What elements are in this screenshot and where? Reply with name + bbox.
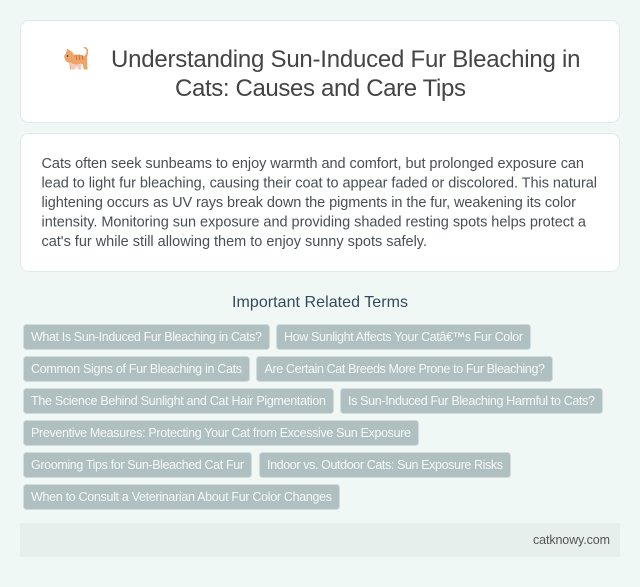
tag: what is: What Is Sun-Induced Fur Bleaching in Cats? [31, 330, 262, 344]
tag: what is [24, 324, 270, 350]
tag: common signs [24, 356, 250, 382]
text block: introduction: cat's fur while still allowing them to enjoy sunny spots safely. [42, 234, 427, 250]
title: Understanding Sun-Induced Fur Bleaching in [111, 46, 580, 73]
text block: introduction: lead to light fur bleaching, causing their coat to appear faded or discolored. This natural [42, 176, 597, 192]
title [111, 46, 580, 102]
panel: introduction text [20, 134, 620, 272]
tag list: related terms [24, 324, 602, 510]
heading: related terms: Important Related Terms [232, 294, 408, 311]
tag: grooming: Grooming Tips for Sun-Bleached Cat Fur [31, 458, 244, 472]
panel: title card [20, 20, 620, 122]
tag: science: The Science Behind Sunlight and Cat Hair Pigmentation [31, 394, 326, 408]
text block: introduction [42, 156, 597, 250]
tag: veterinarian: When to Consult a Veterinarian About Fur Color Changes [31, 490, 332, 504]
tag: preventive: Preventive Measures: Protecting Your Cat from Excessive Sun Exposure [31, 426, 411, 440]
tag: harmful [340, 388, 602, 414]
footer [20, 523, 620, 557]
tag: how sunlight: How Sunlight Affects Your Catâ€™s Fur Color [284, 330, 523, 344]
tag: veterinarian [24, 484, 340, 510]
tag: common signs: Common Signs of Fur Bleaching in Cats [31, 362, 242, 376]
icon: cat [64, 47, 88, 70]
tag: how sunlight [276, 324, 530, 350]
tag: harmful: Is Sun-Induced Fur Bleaching Harmful to Cats? [348, 394, 595, 408]
text block: introduction: intensity. Monitoring sun exposure and providing shaded resting spots helps protect a [42, 214, 587, 230]
title: Cats: Causes and Care Tips [175, 75, 466, 102]
tag: grooming [24, 452, 252, 478]
tag: breeds [256, 356, 552, 382]
tag: preventive [24, 420, 418, 446]
tag: breeds: Are Certain Cat Breeds More Prone to Fur Bleaching? [264, 362, 545, 376]
text block: introduction: Cats often seek sunbeams to enjoy warmth and comfort, but prolonged exposure can [42, 156, 584, 172]
tag: indoor vs outdoor: Indoor vs. Outdoor Cats: Sun Exposure Risks [267, 458, 503, 472]
tag: science [24, 388, 334, 414]
footer: catknowy.com [533, 533, 610, 547]
tag: indoor vs outdoor [260, 452, 510, 478]
text block: introduction: lightening occurs as UV rays break down the pigments in the fur, weakening its color [42, 195, 576, 211]
